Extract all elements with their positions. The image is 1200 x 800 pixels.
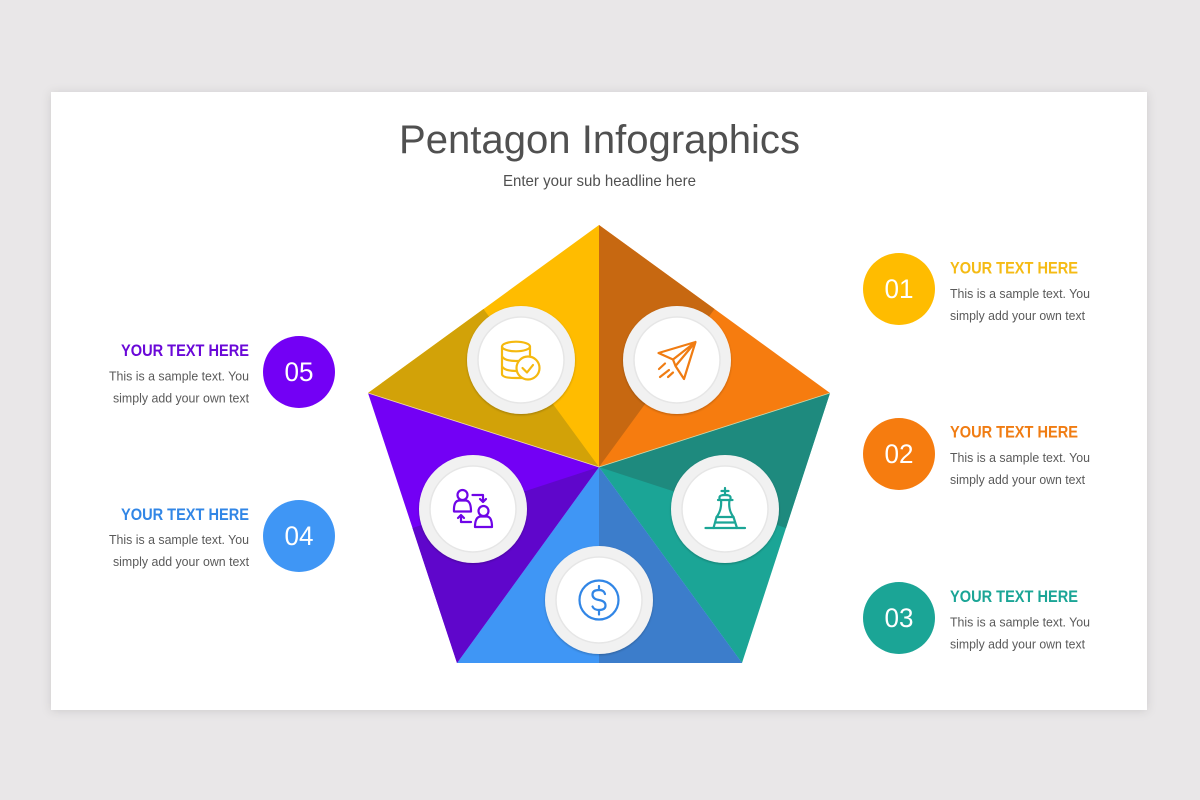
icon badge: paper plane xyxy=(623,306,731,414)
text 04: simply add your own text xyxy=(113,555,250,569)
text 01 xyxy=(950,287,1090,323)
text 03: This is a sample text. You xyxy=(950,616,1090,630)
segment: orange xyxy=(599,225,830,467)
number badge 02 xyxy=(863,418,935,490)
heading 04: YOUR TEXT HERE xyxy=(121,506,249,524)
text 03 xyxy=(950,616,1090,652)
text 04 xyxy=(109,533,250,569)
text 02 xyxy=(950,451,1090,487)
heading 05: YOUR TEXT HERE xyxy=(121,342,249,360)
item 04 xyxy=(109,500,335,572)
number badge 01: 01 xyxy=(884,274,914,304)
text 05 xyxy=(109,370,250,406)
text 03: simply add your own text xyxy=(950,638,1086,652)
text 01: This is a sample text. You xyxy=(950,287,1090,301)
text 04: This is a sample text. You xyxy=(109,533,249,547)
number badge 02: 02 xyxy=(884,439,914,469)
item 02 xyxy=(863,418,1090,490)
text 05: This is a sample text. You xyxy=(109,370,249,384)
number badge 03: 03 xyxy=(884,603,914,633)
segment: teal xyxy=(599,393,830,663)
item 05 xyxy=(109,336,335,408)
text 05: simply add your own text xyxy=(113,392,250,406)
heading 02: YOUR TEXT HERE xyxy=(950,424,1078,442)
panel: white slide card xyxy=(51,92,1147,710)
pentagon chart xyxy=(368,225,830,663)
segment: blue xyxy=(457,467,742,663)
subtitle: Enter your sub headline here xyxy=(503,173,696,190)
icon badge: chess king xyxy=(671,455,779,563)
text 01: simply add your own text xyxy=(950,309,1086,323)
number badge 04 xyxy=(263,500,335,572)
heading 01: YOUR TEXT HERE xyxy=(950,260,1078,278)
segment: gold xyxy=(368,225,599,467)
segment: purple xyxy=(368,393,599,663)
icon badge: user exchange xyxy=(419,455,527,563)
number badge 04: 04 xyxy=(284,521,314,551)
item 01 xyxy=(863,253,1090,325)
title: Pentagon Infographics xyxy=(399,118,800,162)
number badge 05: 05 xyxy=(284,357,314,387)
number badge 01 xyxy=(863,253,935,325)
number badge 05 xyxy=(263,336,335,408)
text 02: simply add your own text xyxy=(950,473,1086,487)
item 03 xyxy=(863,582,1090,654)
text 02: This is a sample text. You xyxy=(950,451,1090,465)
number badge 03 xyxy=(863,582,935,654)
icon badge: dollar xyxy=(545,546,653,654)
heading 03: YOUR TEXT HERE xyxy=(950,588,1078,606)
icon badge: database xyxy=(467,306,575,414)
